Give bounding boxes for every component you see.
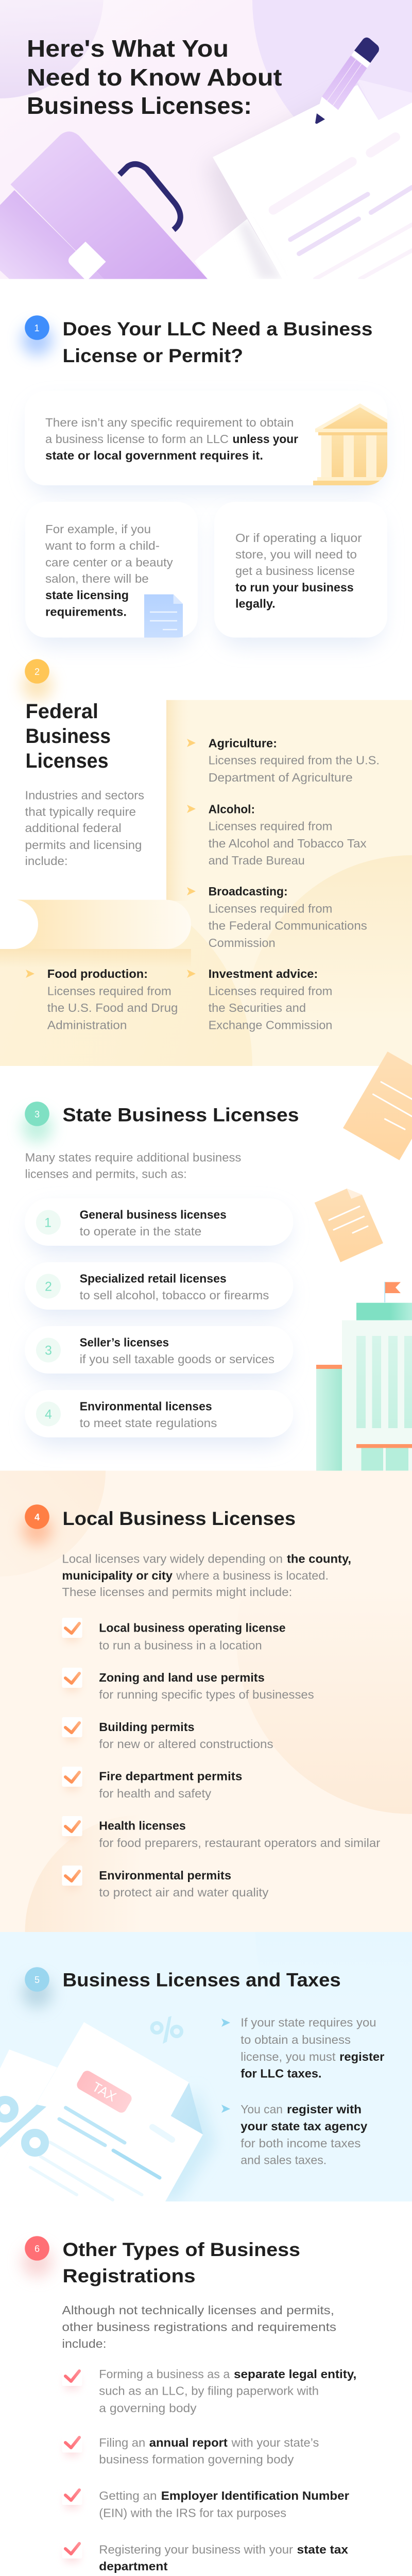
list item: alcohol: Alcohol: bbox=[209, 803, 255, 816]
icon: government building bbox=[313, 403, 387, 485]
section 6 intro text: other business registrations and requirements bbox=[62, 2320, 336, 2334]
section 2 number badge: 2 bbox=[35, 667, 40, 677]
hero background circles bbox=[0, 0, 412, 117]
tax bullet: register for LLC taxes: If your state requires you bbox=[241, 2016, 376, 2029]
card: LLC requirement with temple icon: unless your bbox=[233, 432, 298, 446]
checklist: separate legal entity: such as an LLC, by filing paperwork with bbox=[99, 2384, 319, 2398]
TAX stamp bbox=[77, 2071, 132, 2113]
card: child-care example with document icon: salon, there will be bbox=[45, 572, 149, 585]
section 6 number badge bbox=[22, 2236, 53, 2277]
card: liquor store example: Or if operating a liquor bbox=[235, 531, 362, 545]
tax bullet: register with state agency: You can bbox=[241, 2103, 283, 2116]
card: child-care example with document icon: care center or a beauty bbox=[45, 555, 173, 569]
section 4 number badge: 4 bbox=[35, 1512, 40, 1522]
section 4 intro text: municipality or city bbox=[62, 1569, 173, 1582]
checklist: building permits bbox=[62, 1717, 273, 1751]
list item: broadcasting: the Federal Communications bbox=[209, 919, 367, 933]
section 2 heading bbox=[26, 700, 111, 772]
illustration: orange paper small bbox=[315, 1189, 383, 1262]
checklist: annual report: annual report bbox=[149, 2436, 228, 2449]
section 2 intro text: permits and licensing bbox=[25, 838, 142, 852]
list item: investment advice: Exchange Commission bbox=[209, 1018, 332, 1031]
section 3 intro text: licenses and permits, such as: bbox=[25, 1167, 187, 1181]
section 6 intro text: Although not technically licenses and permits, bbox=[62, 2303, 334, 2317]
section 6 heading bbox=[63, 2239, 300, 2286]
checklist: health licenses: Health licenses bbox=[99, 1819, 186, 1832]
section 6 heading: Registrations bbox=[63, 2265, 196, 2286]
card: child-care example with document icon: requirements. bbox=[45, 605, 127, 618]
TAX stamp: TAX bbox=[90, 2079, 119, 2105]
section 2 intro text bbox=[25, 788, 144, 868]
checklist: local operating license: Local business operating license bbox=[99, 1621, 286, 1634]
section 3 intro text: Many states require additional business bbox=[25, 1151, 241, 1164]
heading: main title: Need to Know About bbox=[27, 64, 282, 91]
checklist: employer identification number: Employer Identification Number bbox=[161, 2489, 349, 2502]
section 4 heading: Local Business Licenses bbox=[63, 1508, 296, 1529]
illustration: tax papers bbox=[0, 2022, 216, 2201]
section 4 intro text bbox=[62, 1552, 351, 1599]
checklist: local operating license bbox=[62, 1618, 286, 1652]
pill: environmental licenses bbox=[25, 1390, 294, 1446]
card: LLC requirement with temple icon bbox=[25, 391, 387, 493]
panel: section 2 federal business licenses bbox=[0, 659, 412, 1066]
section 2 intro text: additional federal bbox=[25, 821, 122, 835]
list item: agriculture: Licenses required from the U.S. bbox=[209, 754, 380, 767]
pill: general business licenses: to operate in the state bbox=[80, 1225, 201, 1238]
pill: specialized retail licenses bbox=[25, 1262, 294, 1318]
list item: investment advice: Investment advice: bbox=[209, 967, 318, 980]
pill: sellers licenses: if you sell taxable goods or services bbox=[80, 1352, 274, 1366]
icon: pencil bbox=[315, 38, 379, 124]
card: LLC requirement with temple icon: a business license to form an LLC bbox=[45, 432, 229, 446]
section 4 intro text: the county, bbox=[287, 1552, 351, 1566]
tax bullet: register for LLC taxes bbox=[221, 2016, 384, 2080]
panel: section 5 licenses and taxes bbox=[0, 1932, 412, 2201]
list item: food production bbox=[26, 967, 178, 1031]
heading: main title bbox=[27, 35, 282, 119]
checklist: annual report: with your state’s bbox=[231, 2436, 319, 2449]
card: LLC requirement with temple icon: There isn’t any specific requirement to obtain bbox=[45, 416, 294, 429]
list item: alcohol: and Trade Bureau bbox=[209, 854, 305, 867]
illustration: document stack bbox=[195, 79, 412, 283]
panel: section 4 local business licenses bbox=[0, 1470, 412, 1932]
checklist: zoning permits bbox=[62, 1668, 314, 1701]
section 1 heading: License or Permit? bbox=[63, 345, 243, 366]
checklist: zoning permits: for running specific types of businesses bbox=[99, 1688, 314, 1701]
pill: specialized retail licenses: 2 bbox=[45, 1280, 52, 1294]
section 4 number badge bbox=[22, 1504, 52, 1545]
white intro panel bbox=[0, 671, 191, 949]
checklist: health licenses: for food preparers, restaurant operators and similar bbox=[99, 1836, 381, 1850]
list item: investment advice: Licenses required from bbox=[209, 985, 332, 998]
section 6 intro text: include: bbox=[62, 2337, 107, 2350]
list item: alcohol: Licenses required from bbox=[209, 820, 332, 833]
section 6 heading: Other Types of Business bbox=[63, 2239, 300, 2260]
checklist: annual report: Filing an bbox=[99, 2436, 145, 2449]
section 5 number badge: 5 bbox=[35, 1975, 40, 1985]
tax bullet: register with state agency: for both income taxes bbox=[241, 2137, 360, 2150]
pill: general business licenses: 1 bbox=[44, 1216, 52, 1230]
card: child-care example with document icon: want to form a child- bbox=[45, 539, 160, 552]
section 2 intro text: include: bbox=[25, 854, 68, 868]
panel: section 6 other registrations bbox=[22, 2236, 356, 2576]
icon: small percent sign bbox=[152, 2016, 181, 2044]
card: liquor store example: get a business license bbox=[235, 564, 355, 578]
list item: alcohol: the Alcohol and Tobacco Tax bbox=[209, 837, 367, 850]
checklist: separate legal entity: separate legal entity, bbox=[234, 2367, 356, 2381]
section 2 number badge bbox=[22, 659, 53, 701]
section 2 intro text: that typically require bbox=[25, 805, 136, 819]
checklist: building permits: for new or altered constructions bbox=[99, 1737, 273, 1751]
checklist: annual report: business formation governing body bbox=[99, 2452, 294, 2466]
list item: food production: Licenses required from bbox=[47, 985, 171, 998]
section 6 intro text bbox=[62, 2303, 336, 2350]
list item: food production: the U.S. Food and Drug bbox=[47, 1001, 178, 1014]
section 5 number badge bbox=[22, 1967, 53, 2008]
section 2 intro text: Industries and sectors bbox=[25, 788, 144, 802]
card: child-care example with document icon bbox=[26, 524, 198, 650]
section 2 heading: Business bbox=[26, 725, 111, 748]
list item: agriculture bbox=[187, 737, 380, 784]
icon: briefcase bbox=[0, 131, 208, 279]
list item: food production: Food production: bbox=[47, 967, 148, 980]
list item: broadcasting: Licenses required from bbox=[209, 902, 332, 915]
checklist: local operating license: to run a business in a location bbox=[99, 1638, 262, 1652]
checklist: fire department permits: for health and safety bbox=[99, 1787, 212, 1800]
pill: general business licenses: General business licenses bbox=[80, 1208, 227, 1221]
card: liquor store example: legally. bbox=[235, 597, 276, 610]
checklist: building permits: Building permits bbox=[99, 1720, 195, 1734]
section 1 number badge: 1 bbox=[34, 323, 40, 333]
card: liquor store example: store, you will need to bbox=[235, 548, 357, 561]
list item: broadcasting bbox=[187, 885, 367, 950]
panel: section 3 state business licenses bbox=[22, 1052, 412, 1471]
section 2 heading: Licenses bbox=[26, 750, 108, 772]
section 1 number badge bbox=[22, 315, 53, 355]
tax bullet: register for LLC taxes: for LLC taxes. bbox=[241, 2067, 321, 2080]
percent sign large bbox=[0, 2100, 46, 2153]
checklist: separate legal entity bbox=[62, 2367, 356, 2415]
section 6 number badge: 6 bbox=[35, 2244, 40, 2254]
section 3 heading: State Business Licenses bbox=[63, 1105, 299, 1125]
pill: general business licenses bbox=[25, 1198, 294, 1254]
section 3 number badge: 3 bbox=[35, 1109, 40, 1120]
card: liquor store example bbox=[214, 502, 387, 646]
list item: food production: Administration bbox=[47, 1018, 127, 1031]
tax bullet: register with state agency: your state tax agency bbox=[241, 2120, 368, 2133]
list item: broadcasting: Broadcasting: bbox=[209, 885, 288, 898]
section 4 intro text: where a business is located. bbox=[176, 1569, 329, 1582]
checklist: fire department permits: Fire department permits bbox=[99, 1770, 242, 1783]
tax bullet: register for LLC taxes: license, you must bbox=[241, 2050, 336, 2063]
illustration: office building bbox=[316, 1282, 412, 1471]
list item: broadcasting: Commission bbox=[209, 936, 276, 950]
list item: agriculture: Agriculture: bbox=[209, 737, 277, 750]
section 1 heading bbox=[63, 318, 373, 366]
pill: sellers licenses bbox=[25, 1326, 294, 1382]
checklist: state tax department: state tax bbox=[297, 2543, 348, 2556]
checklist: separate legal entity: Forming a business as a bbox=[99, 2367, 230, 2381]
checklist: fire department permits bbox=[62, 1767, 242, 1800]
panel: hero header bbox=[0, 0, 412, 283]
card: child-care example with document icon: state licensing bbox=[45, 588, 129, 602]
section 3 intro text bbox=[25, 1151, 241, 1181]
pill: environmental licenses: to meet state regulations bbox=[80, 1416, 217, 1430]
checklist: employer identification number bbox=[62, 2486, 349, 2520]
list item: alcohol bbox=[187, 803, 367, 867]
tax bullet: register for LLC taxes: to obtain a business bbox=[241, 2033, 351, 2046]
section 3 number badge bbox=[22, 1101, 53, 1143]
list item: agriculture: Department of Agriculture bbox=[209, 771, 353, 784]
section 4 intro text: These licenses and permits might include: bbox=[62, 1585, 292, 1599]
panel: section 1 does your LLC need a license bbox=[22, 315, 387, 646]
card: child-care example with document icon: For example, if you bbox=[45, 522, 151, 536]
heading: main title: Here's What You bbox=[27, 35, 229, 62]
pill: sellers licenses: 3 bbox=[45, 1344, 52, 1358]
section 4 intro text: Local licenses vary widely depending on bbox=[62, 1552, 283, 1566]
list item: investment advice: the Securities and bbox=[209, 1001, 306, 1014]
card: LLC requirement with temple icon: state or local government requires it. bbox=[45, 449, 263, 462]
checklist: environmental permits bbox=[62, 1866, 269, 1899]
checklist: annual report bbox=[62, 2433, 319, 2466]
checklist: environmental permits: Environmental permits bbox=[99, 1869, 231, 1882]
tax bullet: register with state agency bbox=[221, 2103, 368, 2167]
checklist: employer identification number: Getting an bbox=[99, 2489, 157, 2502]
tax bullet: register with state agency: and sales taxes. bbox=[241, 2154, 327, 2167]
pill: environmental licenses: Environmental licenses bbox=[80, 1399, 212, 1413]
tax bullet: register for LLC taxes: register bbox=[339, 2050, 384, 2063]
card: liquor store example: to run your business bbox=[235, 581, 354, 594]
pill: specialized retail licenses: Specialized retail licenses bbox=[80, 1272, 227, 1285]
tax bullet: register with state agency: register with bbox=[287, 2103, 362, 2116]
checklist: health licenses bbox=[62, 1816, 381, 1850]
list item: investment advice bbox=[187, 967, 332, 1031]
checklist: employer identification number: (EIN) with the IRS for tax purposes bbox=[99, 2506, 286, 2520]
checklist: environmental permits: to protect air and water quality bbox=[99, 1886, 269, 1899]
pill: specialized retail licenses: to sell alcohol, tobacco or firearms bbox=[80, 1289, 269, 1302]
icon: document bbox=[144, 595, 183, 638]
section 2 heading: Federal bbox=[26, 700, 98, 723]
section 1 heading: Does Your LLC Need a Business bbox=[63, 318, 373, 340]
checklist: state tax department bbox=[62, 2539, 348, 2573]
checklist: state tax department: department bbox=[99, 2560, 168, 2573]
checklist: state tax department: Registering your business with your bbox=[99, 2543, 293, 2556]
pill: environmental licenses: 4 bbox=[45, 1408, 52, 1422]
pill: sellers licenses: Seller’s licenses bbox=[80, 1335, 169, 1349]
heading: main title: Business Licenses: bbox=[27, 92, 252, 119]
checklist: separate legal entity: a governing body bbox=[99, 2401, 197, 2415]
checklist: zoning permits: Zoning and land use permits bbox=[99, 1671, 265, 1684]
section 5 heading: Business Licenses and Taxes bbox=[63, 1970, 341, 1991]
illustration: orange paper large bbox=[343, 1052, 412, 1160]
